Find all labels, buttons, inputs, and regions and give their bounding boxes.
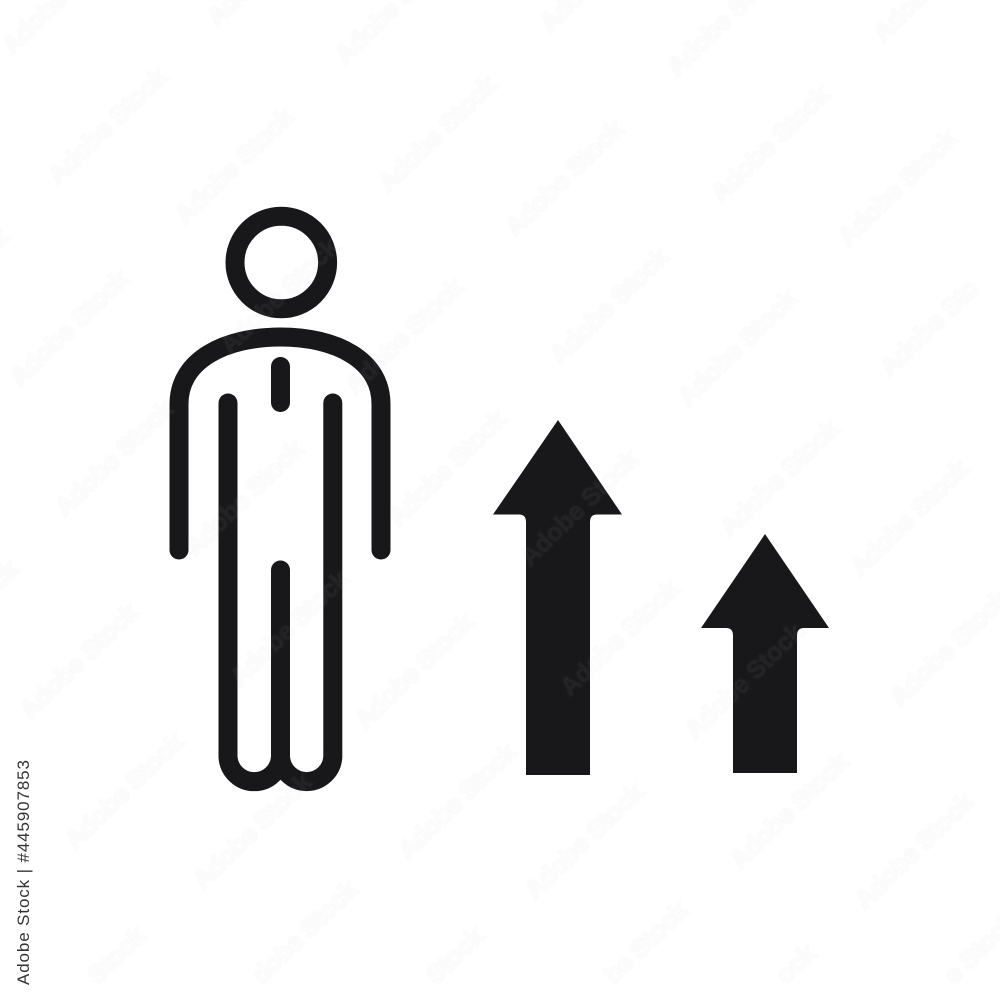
- stock image id: Adobe Stock | #445907853: [14, 760, 33, 985]
- watermark pattern: Stock: [421, 922, 489, 989]
- watermark pattern: Adobe Stock: [706, 81, 835, 207]
- watermark pattern: Adobe Stock: [833, 125, 962, 251]
- watermark pattern: Adobe Sto: [875, 274, 984, 381]
- watermark pattern: Adobe Stock: [520, 778, 649, 904]
- watermark pattern: Adobe Stock: [5, 265, 134, 391]
- watermark pattern: Adobe Stock: [373, 71, 502, 197]
- watermark pattern: Adobe Stock: [188, 768, 317, 894]
- watermark pattern: Adobe Stock: [215, 233, 344, 359]
- watermark pattern: Adobe Stock: [850, 788, 979, 914]
- person body and legs: [228, 403, 333, 782]
- watermark pattern: Adobe Stock: [50, 395, 179, 521]
- watermark pattern: Adobe Stock: [340, 273, 469, 399]
- watermark pattern: Adobe Stock: [500, 115, 629, 241]
- watermark pattern: ock: [771, 939, 821, 989]
- watermark pattern: Adobe Stock: [170, 103, 299, 229]
- watermark pattern: Adobe Stock: [180, 435, 309, 561]
- watermark pattern: Adobe Stock: [43, 63, 172, 189]
- watermark pattern: dobe Stock: [247, 876, 363, 989]
- watermark pattern: Adobe Stock: [673, 285, 802, 411]
- watermark pattern: Adobe Stock: [545, 243, 674, 369]
- watermark pattern: Adobe Stock: [515, 445, 644, 571]
- watermark pattern: Adobe Stock: [555, 575, 684, 701]
- watermark pattern: Stock: [83, 922, 151, 989]
- watermark pattern: Adobe Stock: [393, 738, 522, 864]
- watermark pattern: Adobe Stock: [715, 415, 844, 541]
- watermark pattern: Adobe Stock: [845, 455, 974, 581]
- watermark pattern: Adobe Stock: [15, 598, 144, 724]
- watermark pattern: Adobe Stock: [60, 728, 189, 854]
- person shoulders and arms: [179, 337, 381, 550]
- icon: short up arrow: [701, 534, 829, 773]
- person head: [235, 216, 328, 309]
- icon: person outline: [179, 216, 381, 782]
- icon: tall up arrow: [493, 420, 622, 775]
- watermark pattern: Adobe Stock: [680, 618, 809, 744]
- person tie mark: [271, 366, 290, 402]
- watermark pattern: be Stock: [599, 897, 693, 989]
- watermark pattern: Adobe Stock: [725, 748, 854, 874]
- watermark pattern: Adobe Stock: [383, 405, 512, 531]
- watermark pattern: Adobe Stock: [225, 565, 354, 691]
- watermark pattern: Adobe Stock: [350, 608, 479, 734]
